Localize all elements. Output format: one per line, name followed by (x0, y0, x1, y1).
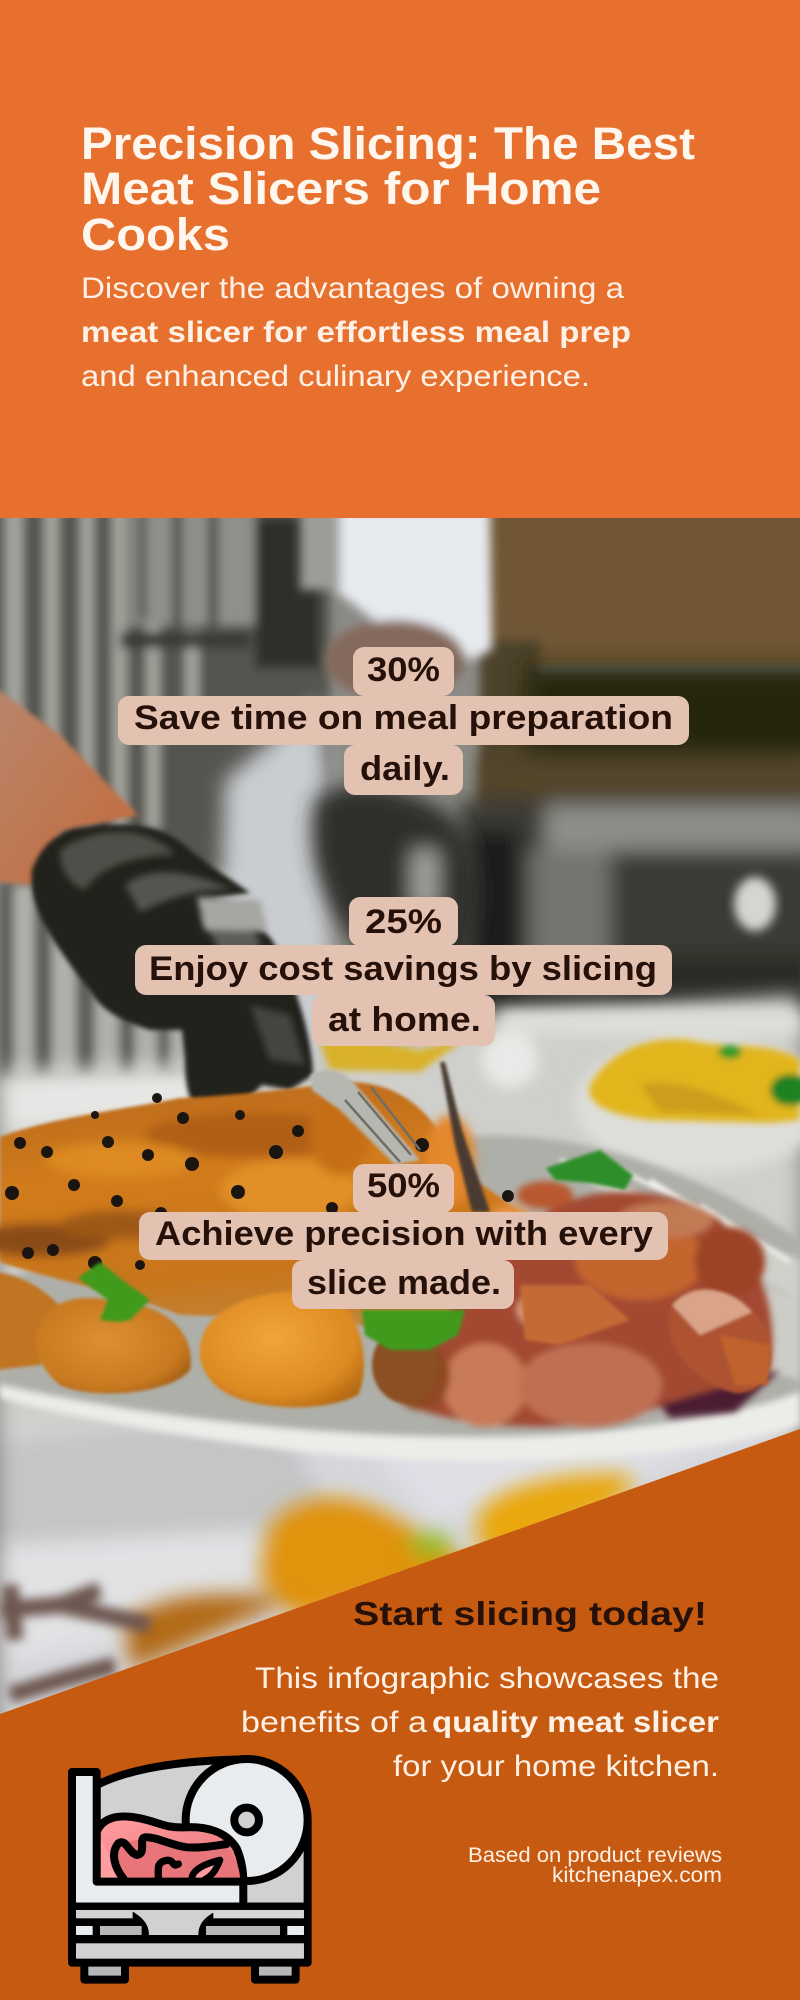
source note: Based on product reviews (468, 1844, 722, 1867)
stat text: Save time on meal preparation (134, 699, 673, 737)
label pills (135, 897, 672, 1046)
icon: carriage (72, 1772, 243, 1907)
stat text: 30% (367, 651, 440, 689)
icon: base (72, 1907, 308, 1963)
label pills (139, 1164, 668, 1309)
stat text: 25% (365, 903, 442, 941)
title: Cooks (81, 209, 230, 260)
roast chicken (0, 1082, 555, 1340)
blurred twigs (0, 1585, 150, 1695)
top header panel (0, 0, 800, 518)
title: Precision Slicing: The Best (81, 118, 695, 169)
subtitle: meat slicer for effortless meal prep (81, 316, 631, 349)
subtitle (81, 272, 631, 393)
bare arm (0, 687, 138, 885)
fork (310, 1070, 420, 1165)
icon: feet (84, 1960, 296, 1980)
near glove (32, 825, 313, 1117)
closing description: for your home kitchen. (393, 1750, 719, 1783)
knife (440, 1062, 490, 1212)
source note: kitchenapex.com (552, 1864, 722, 1887)
closing description: quality meat slicer (432, 1706, 719, 1739)
stat text (155, 1167, 653, 1302)
stat text: Achieve precision with every (155, 1215, 653, 1253)
stat text: daily. (360, 750, 450, 788)
stat text: 50% (367, 1167, 440, 1205)
icon: meat slicer (72, 1759, 308, 1980)
stat text (134, 651, 673, 788)
closing description: benefits of a (241, 1706, 427, 1739)
kitchen background (460, 500, 800, 1020)
stat 30% (118, 647, 689, 795)
stat text: slice made. (307, 1264, 501, 1302)
stat text: at home. (328, 1001, 481, 1039)
title: Meat Slicers for Home (81, 163, 601, 214)
subtitle: and enhanced culinary experience. (81, 360, 590, 393)
light reflection (734, 877, 776, 931)
white apron centre (215, 700, 350, 1070)
stat text: Enjoy cost savings by slicing (149, 950, 657, 988)
icon: slicer body (97, 1759, 308, 1907)
bacon wrapped sausages (390, 1181, 780, 1427)
cloves (5, 1093, 514, 1270)
source note (468, 1844, 722, 1887)
striped apron (0, 510, 330, 1080)
subtitle: Discover the advantages of owning a (81, 272, 624, 305)
title (81, 118, 695, 260)
far glove (296, 772, 472, 945)
icon: blade disc (186, 1759, 308, 1881)
label pills (118, 647, 689, 795)
blurred foreground food (125, 1474, 632, 1670)
icon: meat (97, 1816, 243, 1882)
parsley (78, 1150, 633, 1350)
back plate with yellow food (315, 1010, 800, 1173)
closing description: This infographic showcases the (255, 1662, 719, 1695)
stat text (149, 903, 657, 1039)
table cloth (0, 995, 800, 1730)
sleeve and hand (300, 510, 492, 700)
platter (0, 1136, 800, 1461)
stat 25% (135, 897, 672, 1046)
closing description (241, 1662, 719, 1783)
stat 50% (139, 1164, 668, 1309)
call to action heading: Start slicing today! (353, 1595, 707, 1632)
bottom diagonal panel (0, 1429, 800, 2000)
icon: blade hub (234, 1808, 259, 1832)
potatoes (0, 1272, 438, 1407)
photo: chef slicing roast on a platter (0, 500, 800, 1730)
